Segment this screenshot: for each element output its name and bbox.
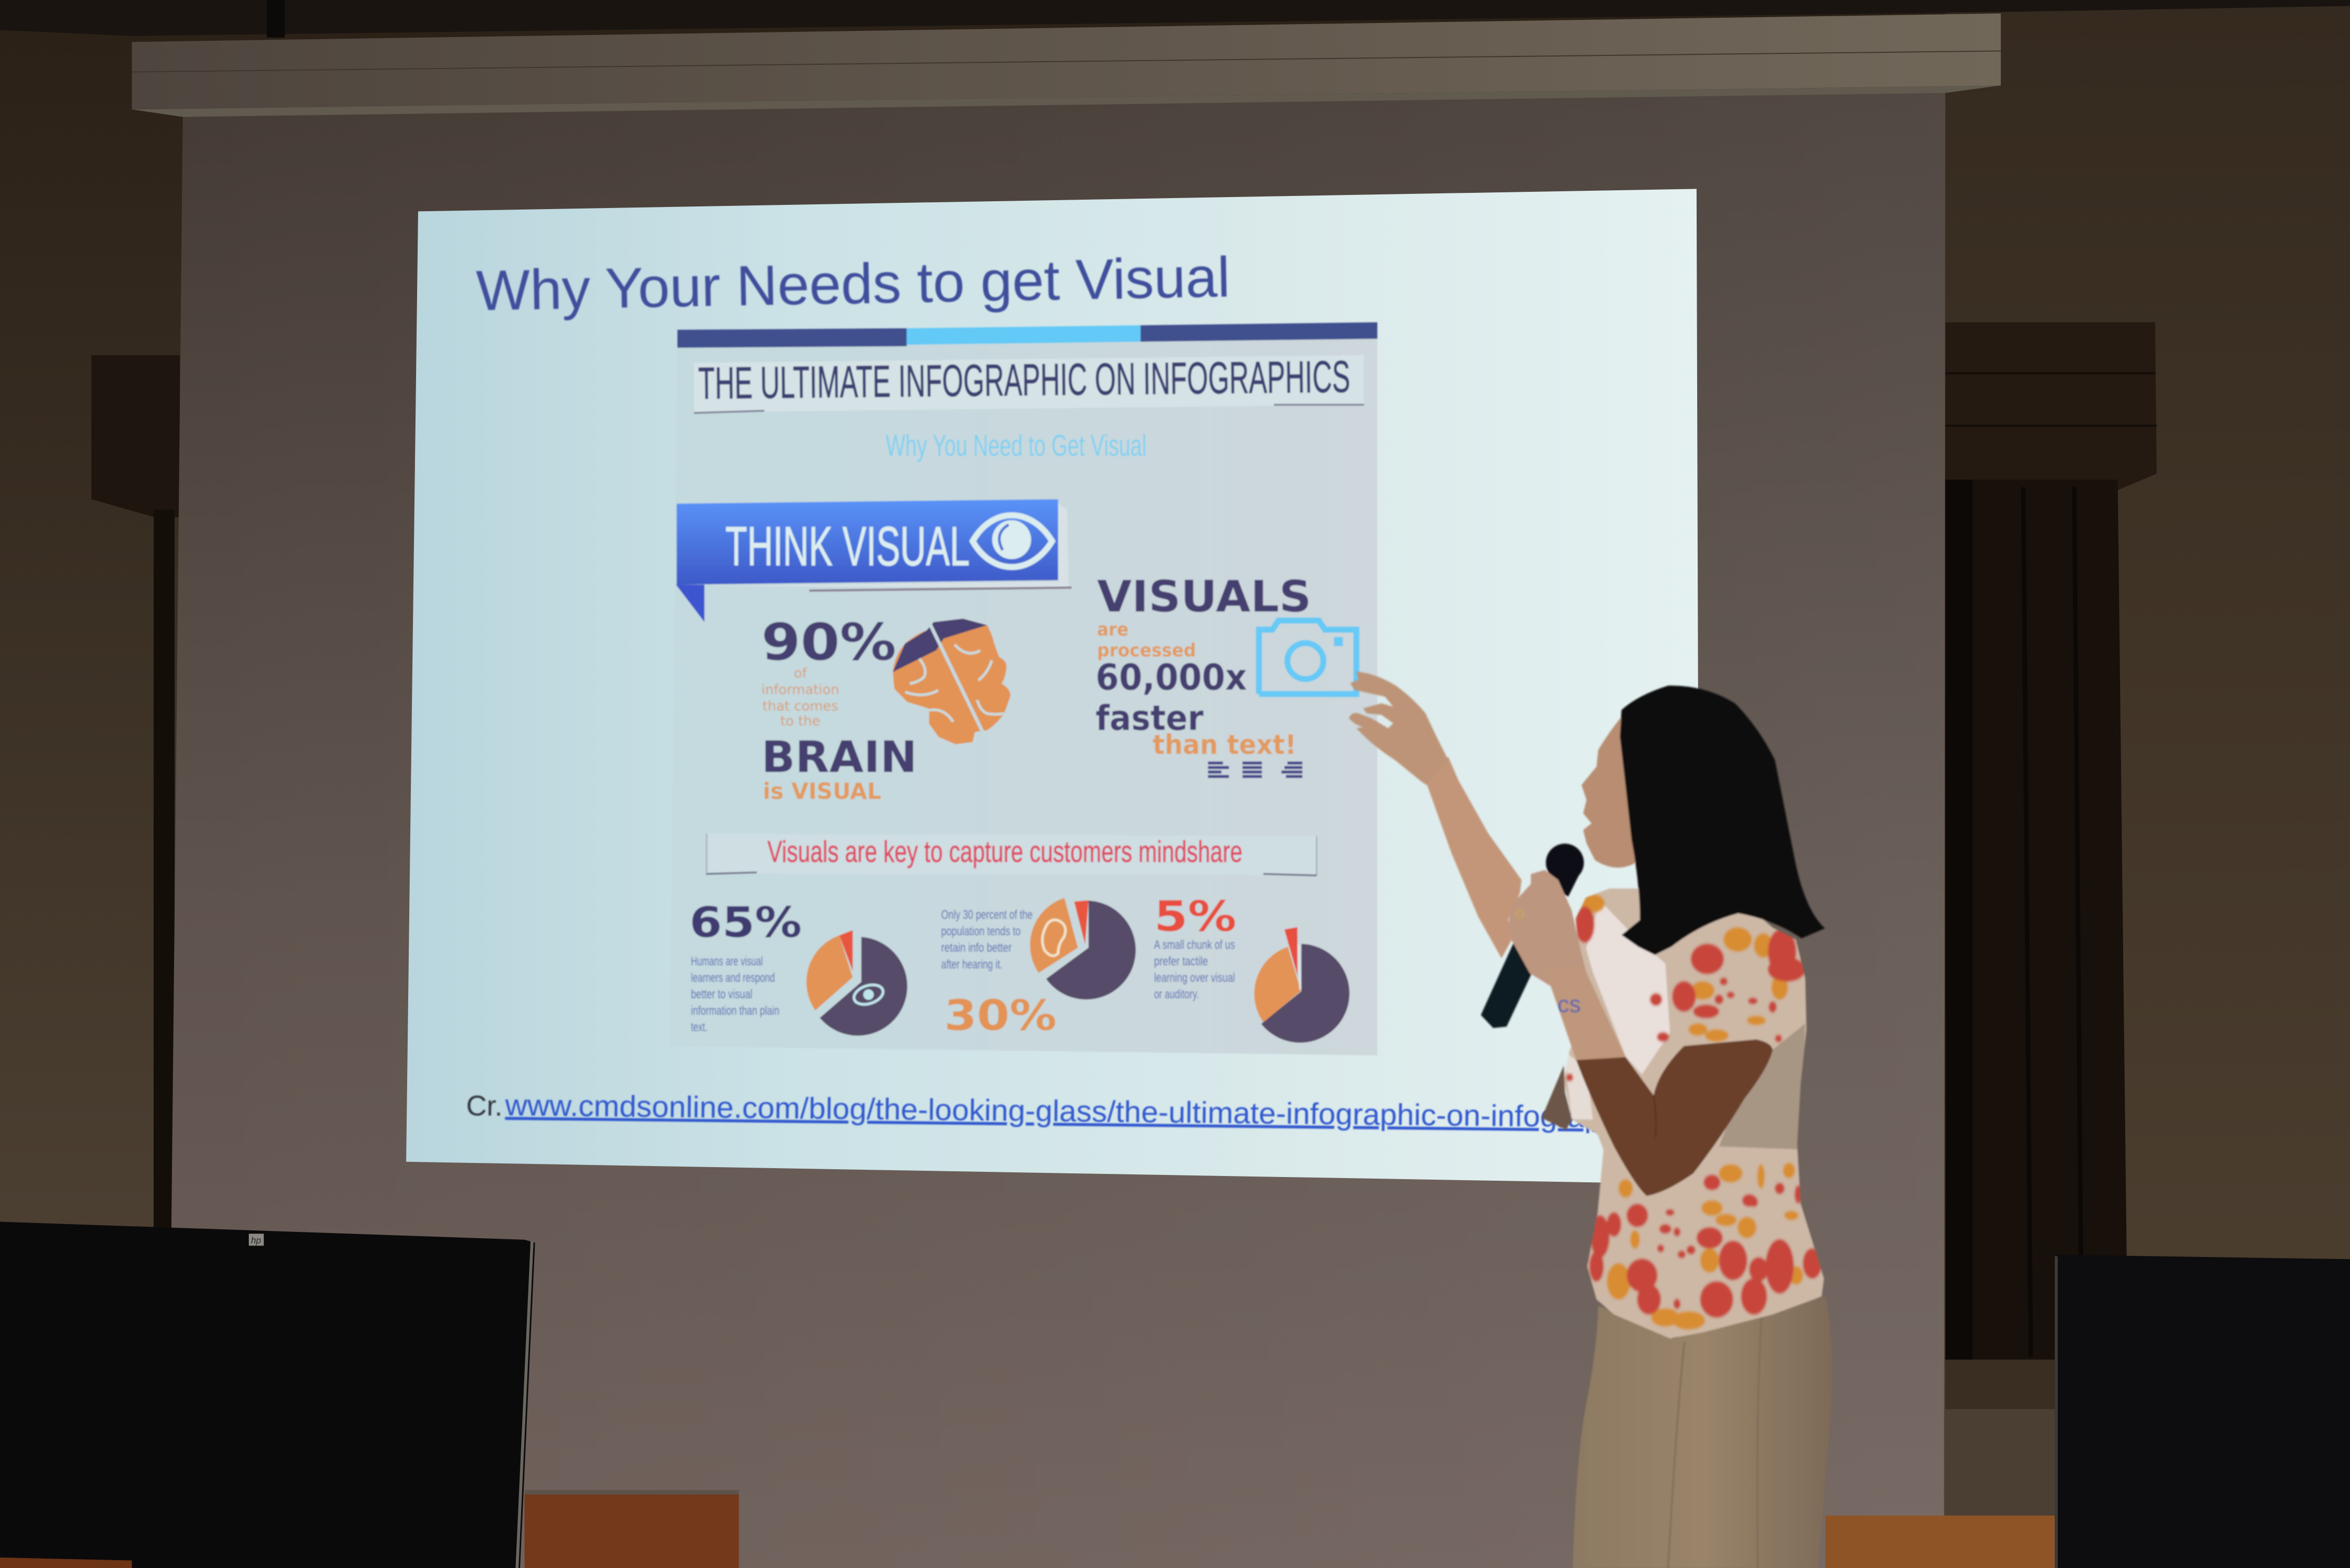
brain caption: [762, 665, 839, 729]
stat: 5%: 5%: [1154, 892, 1237, 941]
hand holding microphone: [1508, 870, 1586, 987]
right curtain valance and drape: [1945, 322, 2157, 1516]
caption 5%: A small chunk of us: [1154, 938, 1235, 952]
subheading: Why You Need to Get Visual: [886, 429, 1147, 463]
icon: hp logo: [249, 1233, 264, 1246]
microphone: [1481, 844, 1584, 1028]
blouse: [1563, 889, 1826, 1341]
brain caption: that comes: [763, 698, 838, 714]
heading ribbon: THE ULTIMATE INFOGRAPHIC ON INFOGRAPHICS: [698, 352, 1351, 409]
icon: eye: [973, 515, 1052, 567]
top colour bar: [677, 322, 1377, 348]
think visual banner: THINK VISUAL: [725, 515, 970, 577]
mindshare heading ribbon: [706, 834, 1317, 875]
projected slide: [406, 189, 1700, 1184]
pie chart 65%: [807, 930, 907, 1036]
brain statistic: 90%: [762, 612, 896, 672]
raised forearm: [1426, 757, 1522, 959]
caption 5%: [1154, 938, 1235, 1001]
wooden panel left: [525, 1490, 739, 1568]
icon: text lines: [1208, 762, 1303, 778]
ceiling: [0, 0, 2350, 38]
caption 30%: population tends to: [941, 925, 1021, 939]
slide title: Why Your Needs to get Visual: [476, 245, 1230, 323]
left monitor: [0, 1221, 535, 1568]
caption 65%: [691, 954, 779, 1034]
left curtain valance and strip: [91, 355, 180, 1229]
caption 65%: better to visual: [691, 987, 752, 1001]
heading ribbon: [694, 352, 1364, 413]
caption 65%: text.: [691, 1020, 707, 1034]
source credit: Cr.: [466, 1090, 503, 1122]
head: [1582, 686, 1825, 955]
screen housing: [132, 14, 2001, 117]
brain statistic: is VISUAL: [763, 779, 881, 805]
think visual banner: [676, 499, 1072, 622]
wooden panel right: [1825, 1516, 2056, 1568]
caption 30%: retain info better: [941, 941, 1011, 955]
caption 5%: learning over visual: [1154, 971, 1235, 985]
stat: 65%: [689, 898, 907, 1036]
presenter: [1349, 672, 1832, 1568]
visuals statistic: than text!: [1153, 730, 1296, 761]
icon: eye on pie: [851, 982, 885, 1008]
shaded arm: [1576, 1040, 1772, 1196]
pie chart 5%: [1254, 927, 1350, 1043]
visuals statistic: faster: [1096, 698, 1204, 739]
visuals statistic: 60,000x: [1096, 656, 1247, 698]
skirt: [1573, 1297, 1832, 1568]
caption 65%: Humans are visual: [691, 954, 763, 969]
lower arm: [1541, 966, 1772, 1196]
wrist: [1544, 966, 1626, 1060]
visuals statistic: VISUALS: [1097, 571, 1311, 622]
right monitor: [2055, 1255, 2350, 1568]
stat: 5%: [1154, 892, 1350, 1043]
caption 5%: prefer tactile: [1154, 954, 1208, 969]
brain statistic: [762, 612, 1010, 805]
gap showing screen behind the elbow: [1541, 1066, 1572, 1130]
icon: ear: [1042, 920, 1065, 956]
wrist writing: cs: [1558, 991, 1581, 1017]
icon: camera: [1259, 620, 1356, 694]
stat: 30%: [941, 898, 1136, 1040]
icon: hp logo: hp: [251, 1235, 261, 1246]
caption 30%: after hearing it.: [941, 958, 1003, 972]
caption 65%: information than plain: [691, 1004, 779, 1018]
visuals statistic: are: [1097, 619, 1128, 640]
hair: [1620, 686, 1825, 955]
caption 30%: [941, 908, 1033, 972]
pie chart 30%: [1030, 898, 1136, 999]
caption 30%: Only 30 percent of the: [941, 908, 1033, 922]
brain caption: information: [762, 682, 839, 698]
embedded infographic: [670, 322, 1377, 1055]
stat: 30%: 30%: [944, 990, 1056, 1040]
mindshare heading ribbon: Visuals are key to capture customers mindshare: [767, 835, 1242, 869]
caption 5%: or auditory.: [1154, 987, 1199, 1001]
right wall section: [1945, 0, 2350, 1568]
face: [1582, 717, 1637, 868]
visuals statistic: [1096, 571, 1356, 778]
projection screen: [168, 90, 1945, 1568]
brain caption: to the: [780, 713, 820, 729]
arm and hands: [1349, 672, 1586, 1028]
stat: 65%: 65%: [689, 898, 802, 947]
caption 65%: learners and respond: [691, 971, 775, 985]
brain statistic: BRAIN: [762, 732, 917, 782]
pointing hand: [1349, 672, 1448, 785]
icon: brain: [893, 619, 1010, 744]
brain caption: of: [794, 665, 808, 681]
source credit: www.cmdsonline.com/blog/the-looking-glass/the-ultimate-infographic-on-infographics: [504, 1089, 1656, 1135]
visuals statistic: processed: [1097, 640, 1196, 661]
